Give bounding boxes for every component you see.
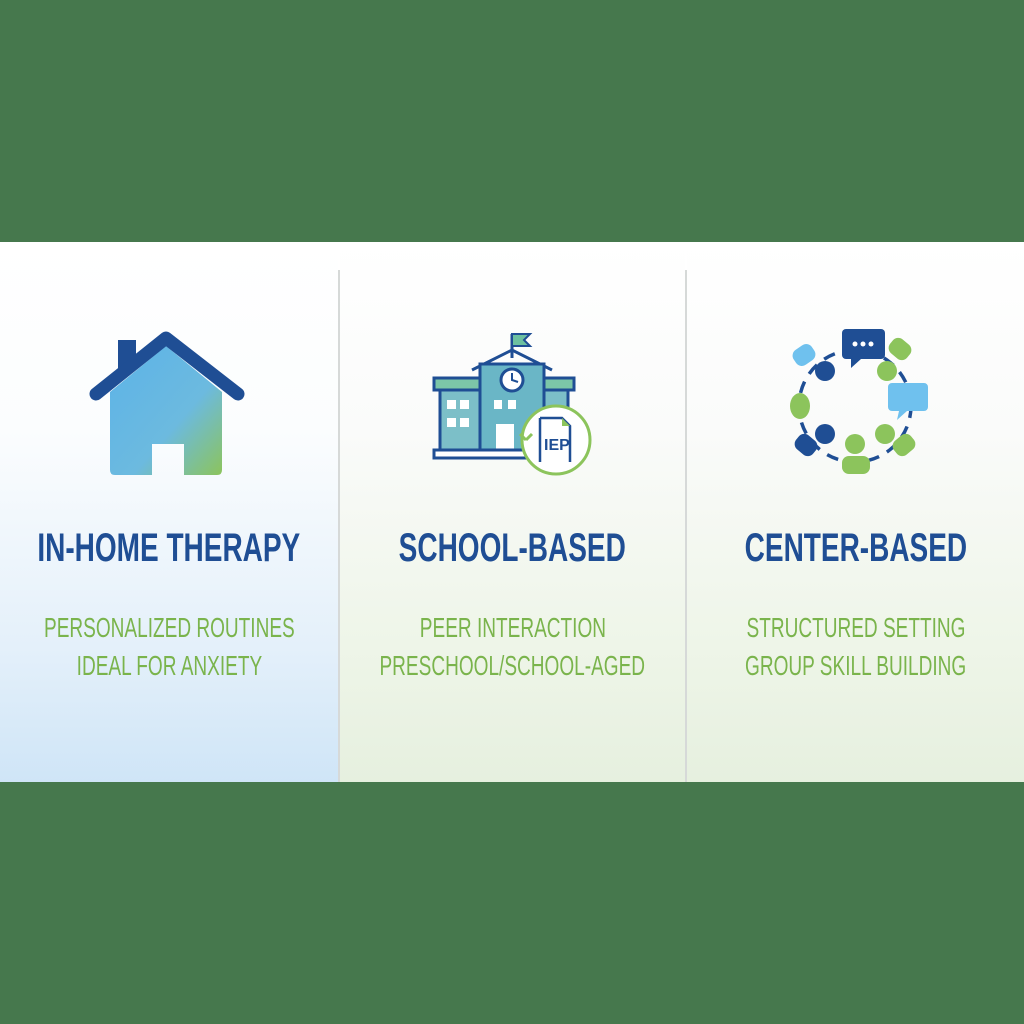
icon: house: [90, 332, 244, 475]
text: in-home benefits: PERSONALIZED ROUTINES: [44, 612, 294, 643]
text: center benefits: STRUCTURED SETTING: [746, 612, 965, 643]
panel: school-based: [340, 242, 685, 782]
panel: center-based: [687, 242, 1024, 782]
icon: school with IEP: [432, 333, 592, 476]
icon: group circle: [790, 329, 928, 474]
text: in-home benefits: [44, 612, 294, 681]
icon: school with IEP: IEP: [544, 437, 570, 454]
text: center benefits: GROUP SKILL BUILDING: [745, 650, 966, 681]
title: in-home therapy: IN-HOME THERAPY: [38, 526, 300, 570]
text: school benefits: PEER INTERACTION: [419, 612, 606, 643]
title: school-based: SCHOOL-BASED: [399, 526, 626, 570]
text: center benefits: [745, 612, 966, 681]
panel: in-home therapy: [0, 242, 338, 782]
title: center-based: CENTER-BASED: [744, 526, 967, 570]
text: in-home benefits: IDEAL FOR ANXIETY: [76, 650, 262, 681]
text: school benefits: [380, 612, 645, 681]
text: school benefits: PRESCHOOL/SCHOOL-AGED: [380, 650, 645, 681]
